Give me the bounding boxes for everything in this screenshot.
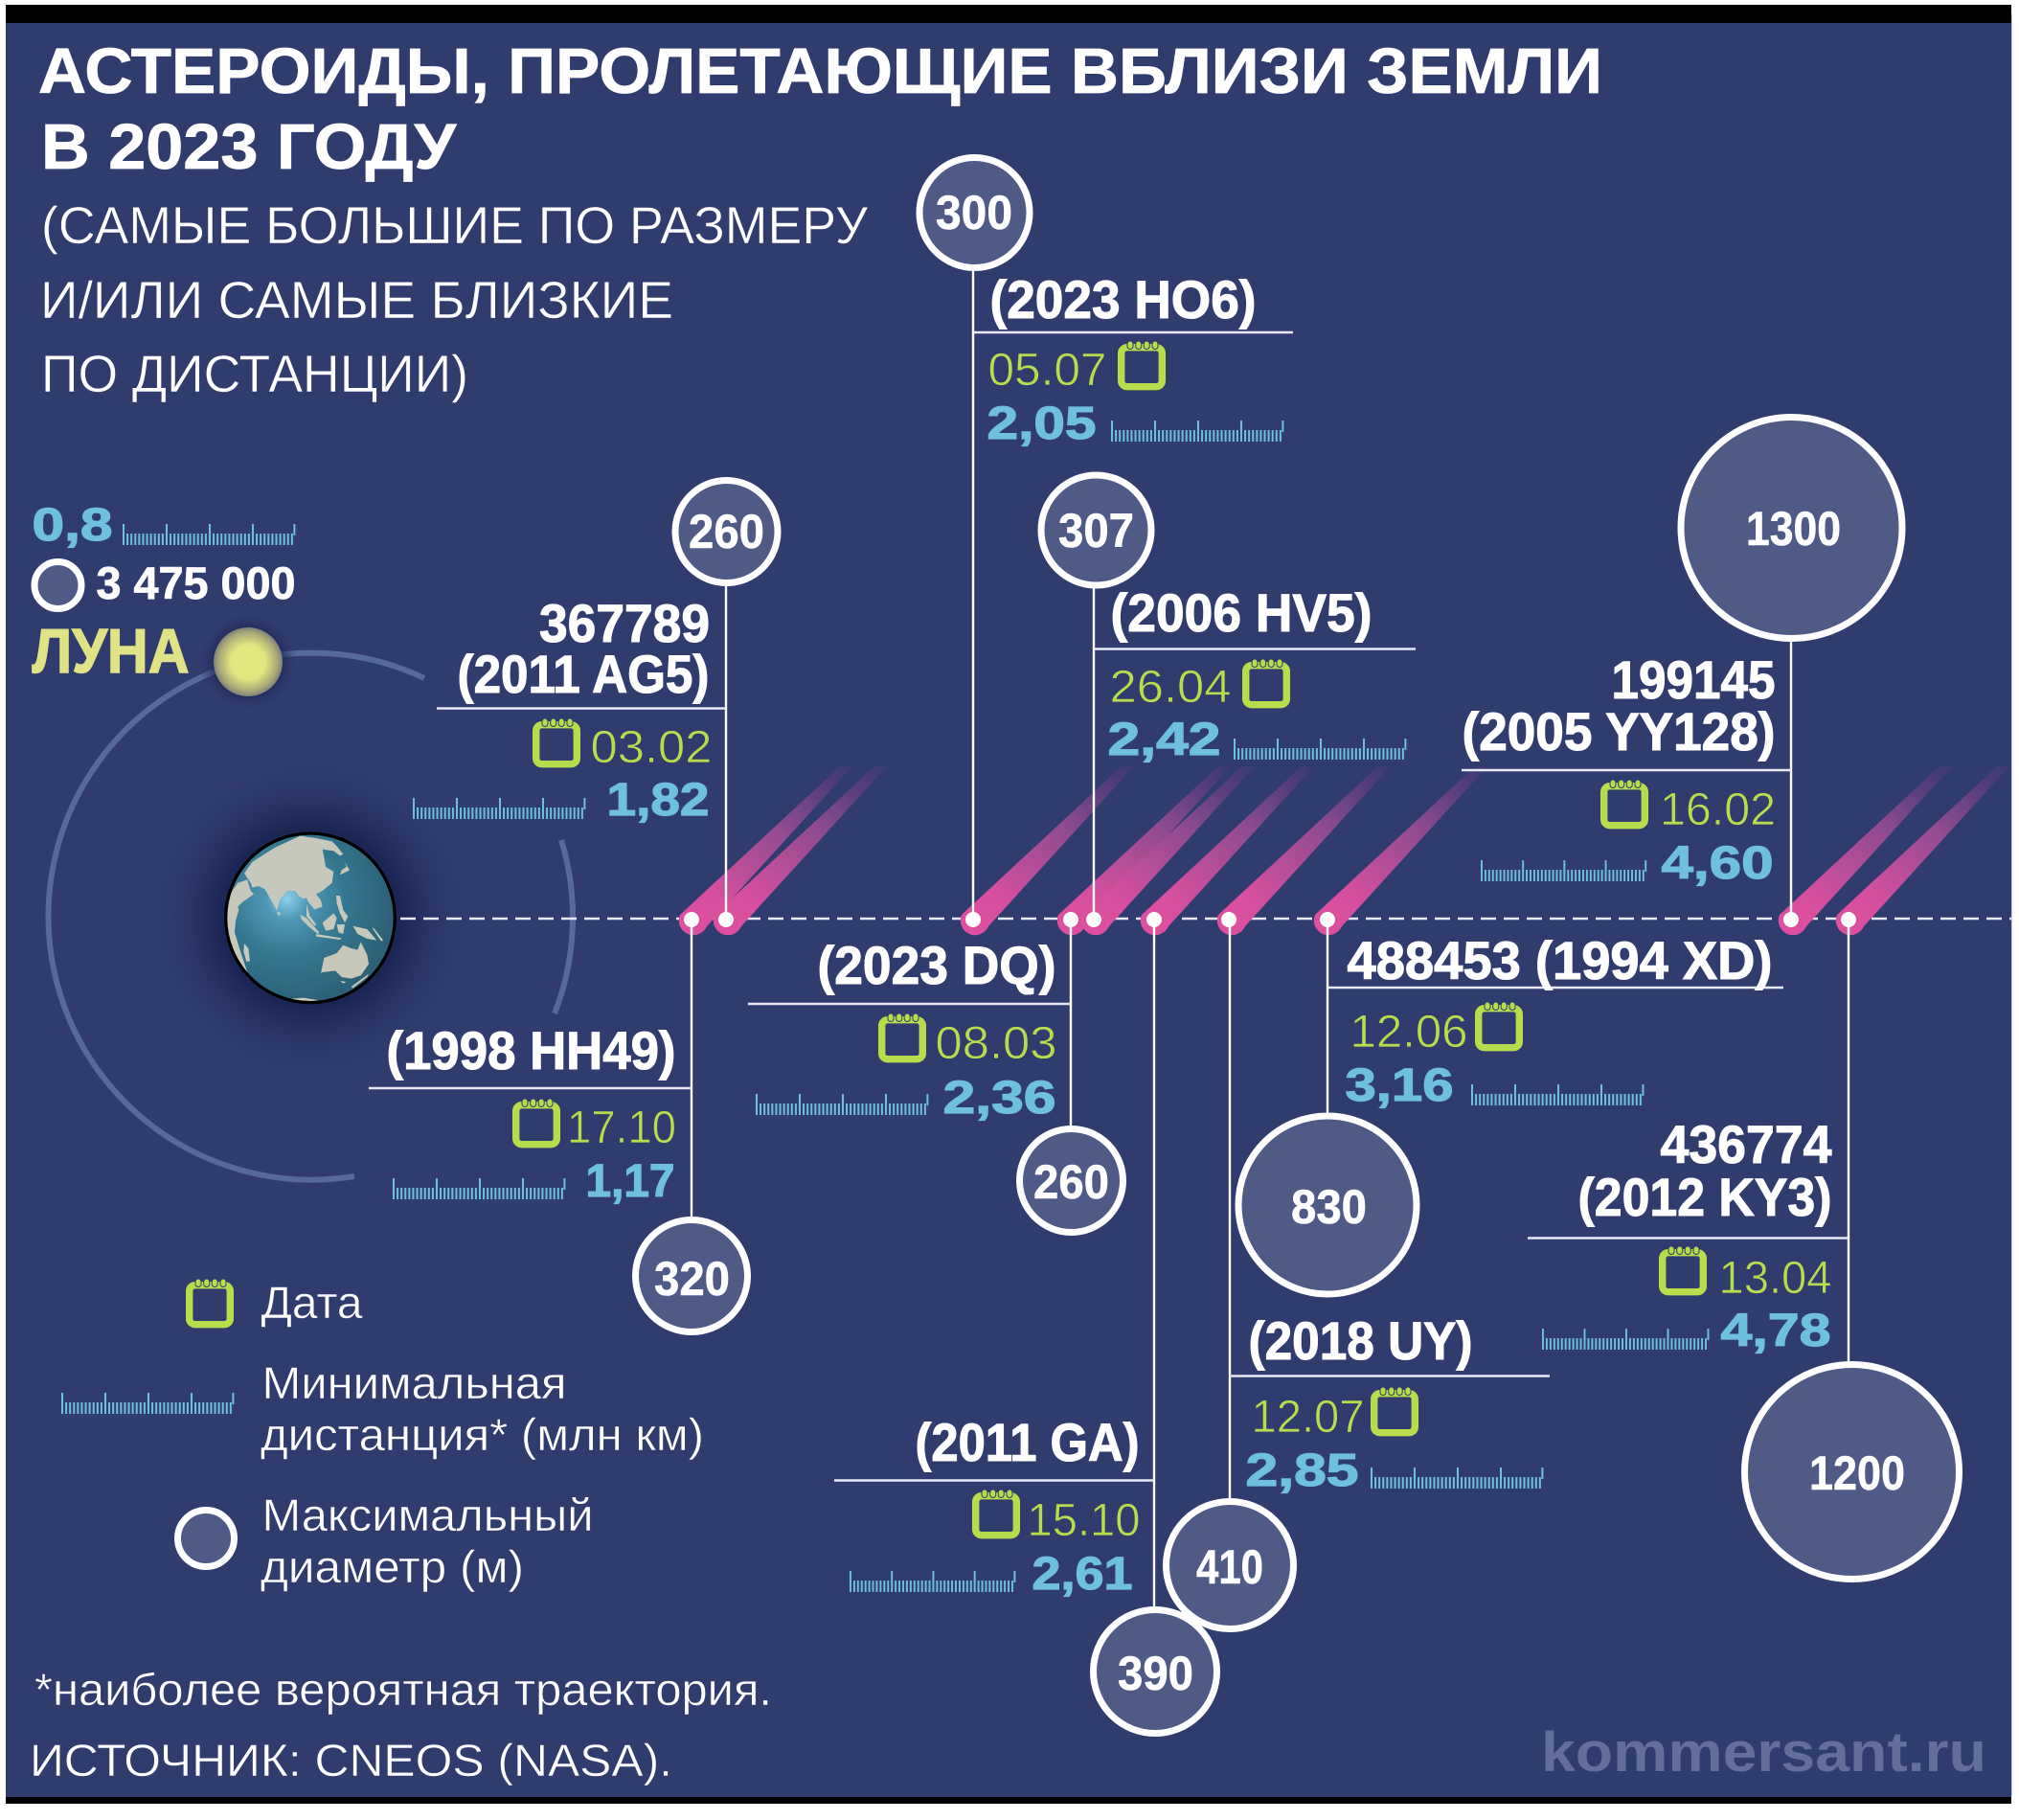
bottom border xyxy=(6,1797,2011,1804)
top border xyxy=(6,5,2011,23)
asteroid: 2006 HV5 xyxy=(1041,475,1416,765)
moon reference xyxy=(33,500,295,686)
moon distance scale xyxy=(123,524,295,539)
asteroid: 2006 HV5: 26.04 xyxy=(1109,662,1232,713)
asteroid: 2011 GA: 390 xyxy=(1118,1647,1193,1700)
asteroid: 488453 (1994 XD): 488453 (1994 XD) xyxy=(1347,930,1772,990)
asteroid: 1998 HH49: (1998 HH49) xyxy=(387,1020,676,1081)
asteroid: 2023 HO6 xyxy=(919,157,1293,449)
subtitle xyxy=(40,195,869,403)
asteroid: 436774 (2012 KY3) xyxy=(1528,1114,1960,1579)
asteroid: 2006 HV5: 2,42 xyxy=(1107,715,1220,765)
asteroid: 436774 (2012 KY3): 4,78 xyxy=(1720,1306,1831,1356)
asteroid: 2011 GA: (2011 GA) xyxy=(916,1412,1140,1472)
asteroid: 2023 DQ: 08.03 xyxy=(935,1018,1057,1069)
subtitle: И/ИЛИ САМЫЕ БЛИЗКИЕ xyxy=(40,270,673,330)
title: В 2023 ГОДУ xyxy=(41,111,457,183)
asteroid: 2006 HV5: 307 xyxy=(1058,504,1134,557)
asteroid: 2018 UY xyxy=(1167,1310,1550,1628)
moon diameter: 3 475 000 xyxy=(96,557,295,608)
asteroid: 2023 DQ xyxy=(748,935,1123,1232)
asteroid: 2018 UY: 2,85 xyxy=(1245,1445,1358,1496)
asteroid: 199145 (2005 YY128): 1300 xyxy=(1746,502,1841,556)
asteroid: 436774 (2012 KY3): 436774 xyxy=(1661,1114,1831,1174)
asteroid: 2023 DQ: 260 xyxy=(1033,1155,1109,1209)
moon orbit xyxy=(48,653,573,1180)
subtitle: (САМЫЕ БОЛЬШИЕ ПО РАЗМЕРУ xyxy=(41,195,869,255)
legend: distance label xyxy=(261,1357,704,1460)
moon diameter marker xyxy=(34,561,81,609)
asteroid: 2023 HO6: 2,05 xyxy=(987,398,1096,449)
asteroid: 2018 UY: (2018 UY) xyxy=(1249,1310,1473,1371)
legend: distance ruler xyxy=(61,1393,234,1408)
right edge line xyxy=(2011,14,2012,1796)
legend: diameter label: Максимальный xyxy=(262,1490,594,1540)
asteroid: 2006 HV5: (2006 HV5) xyxy=(1111,582,1372,643)
legend: distance label: дистанция* (млн км) xyxy=(261,1409,704,1460)
asteroid: 436774 (2012 KY3): (2012 KY3) xyxy=(1578,1167,1831,1227)
asteroid: 199145 (2005 YY128): (2005 YY128) xyxy=(1462,701,1776,762)
asteroid: 2023 HO6: 300 xyxy=(936,186,1012,239)
asteroid: 2023 DQ: 2,36 xyxy=(942,1073,1055,1124)
asteroid: 367789 (2011 AG5) xyxy=(413,481,778,826)
asteroid: 367789 (2011 AG5): (2011 AG5) xyxy=(458,644,709,704)
asteroid: 488453 (1994 XD): 3,16 xyxy=(1345,1060,1454,1111)
asteroid: 2011 GA: 2,61 xyxy=(1032,1549,1132,1600)
moon distance: 0,8 xyxy=(33,500,113,551)
asteroid: 1998 HH49 xyxy=(369,1020,747,1331)
asteroid: 199145 (2005 YY128): 199145 xyxy=(1611,649,1776,710)
asteroid trails xyxy=(679,766,2009,935)
asteroid: 367789 (2011 AG5): 03.02 xyxy=(590,722,713,773)
trajectory axis xyxy=(400,918,2011,920)
asteroid: 2018 UY: 12.07 xyxy=(1251,1392,1364,1443)
watermark: kommersant.ru xyxy=(1541,1721,1986,1784)
legend xyxy=(61,1277,704,1592)
asteroid: 436774 (2012 KY3): 1200 xyxy=(1809,1446,1905,1500)
asteroid: 488453 (1994 XD): 830 xyxy=(1291,1180,1367,1234)
title: АСТЕРОИДЫ, ПРОЛЕТАЮЩИЕ ВБЛИЗИ ЗЕМЛИ xyxy=(38,35,1602,107)
asteroid: 199145 (2005 YY128) xyxy=(1462,418,1902,889)
asteroid: 199145 (2005 YY128): 16.02 xyxy=(1660,785,1776,835)
legend: date icon xyxy=(190,1279,230,1325)
asteroid: 488453 (1994 XD) xyxy=(1238,930,1783,1294)
legend: diameter label: диаметр (м) xyxy=(261,1541,524,1592)
legend: date label: Дата xyxy=(261,1277,363,1328)
asteroid: 2018 UY: 410 xyxy=(1196,1540,1263,1594)
asteroid: 1998 HH49: 1,17 xyxy=(586,1156,674,1207)
asteroid position dots xyxy=(684,912,1856,927)
asteroid: 436774 (2012 KY3): 13.04 xyxy=(1718,1253,1831,1304)
asteroid: 199145 (2005 YY128): 4,60 xyxy=(1661,838,1774,889)
subtitle: ПО ДИСТАНЦИИ) xyxy=(41,344,468,403)
asteroid: 2023 DQ: (2023 DQ) xyxy=(818,935,1055,995)
asteroid: 2011 GA xyxy=(834,1412,1216,1734)
asteroid: 1998 HH49: 320 xyxy=(654,1252,730,1306)
earth glow xyxy=(147,755,473,1081)
asteroid: 367789 (2011 AG5): 260 xyxy=(689,505,764,558)
legend: diameter label xyxy=(261,1490,594,1592)
asteroid: 2011 GA: 15.10 xyxy=(1027,1495,1140,1546)
legend: diameter circle xyxy=(178,1510,234,1567)
moon label: ЛУНА xyxy=(33,616,190,686)
icon: moon xyxy=(198,612,298,712)
legend: distance label: Минимальная xyxy=(262,1357,567,1408)
asteroid: 367789 (2011 AG5): 1,82 xyxy=(607,775,709,826)
leader lines xyxy=(692,270,1849,1614)
title xyxy=(38,35,1602,183)
footnote: *наиболее вероятная траектория. xyxy=(34,1664,772,1715)
asteroid: 488453 (1994 XD): 12.06 xyxy=(1350,1007,1467,1058)
icon: earth xyxy=(223,833,395,1006)
asteroid: 367789 (2011 AG5): 367789 xyxy=(539,593,710,653)
asteroid: 2023 HO6: (2023 HO6) xyxy=(990,269,1257,330)
asteroid: 1998 HH49: 17.10 xyxy=(567,1103,676,1153)
asteroid: 2023 HO6: 05.07 xyxy=(988,345,1107,396)
source: ИСТОЧНИК: CNEOS (NASA). xyxy=(30,1735,672,1786)
